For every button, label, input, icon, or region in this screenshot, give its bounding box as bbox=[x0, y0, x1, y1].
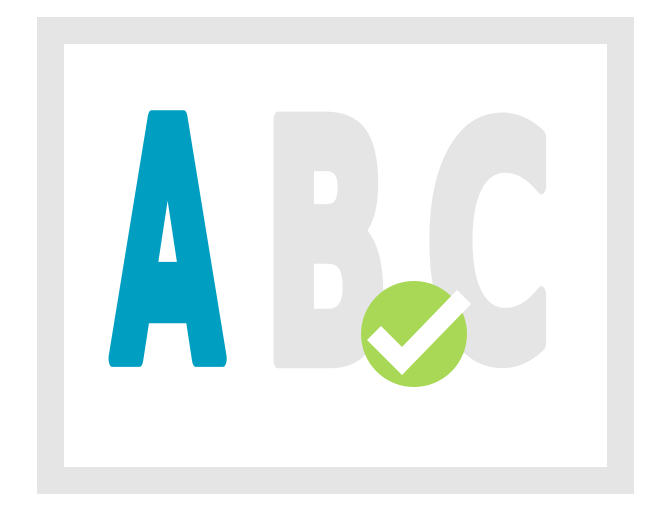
badge circle bbox=[361, 281, 467, 387]
letter C in grey: C bbox=[426, 62, 552, 429]
letter A in blue: A bbox=[112, 53, 224, 436]
icon: green check badge bbox=[361, 281, 471, 387]
letter B in grey: B bbox=[262, 56, 391, 438]
check mark bbox=[367, 290, 471, 375]
